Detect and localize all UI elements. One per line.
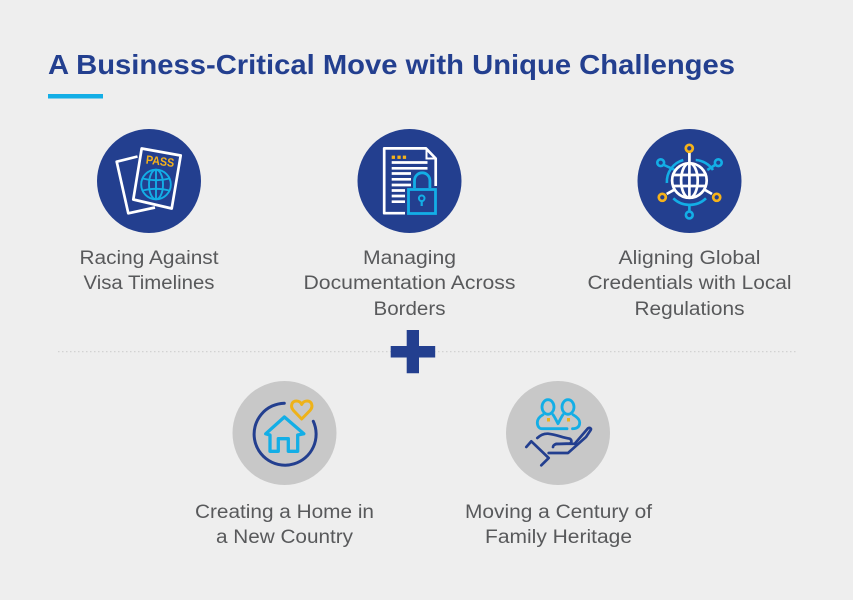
challenge: visa timelines <box>80 129 219 294</box>
challenge: family heritage <box>465 381 653 548</box>
label: global credentials: Regulations <box>634 299 744 320</box>
title: A Business-Critical Move with Unique Challenges <box>48 49 735 80</box>
plus sign <box>391 330 435 373</box>
label: visa timelines: Visa Timelines <box>84 273 214 294</box>
challenge: documentation <box>304 129 516 320</box>
icon: family in hand <box>506 381 610 485</box>
label: global credentials: Aligning Global <box>618 248 760 269</box>
title accent underline <box>48 94 103 98</box>
label: visa timelines: Racing Against <box>80 248 219 269</box>
icon: house and heart <box>232 381 336 485</box>
label: documentation: Documentation Across <box>304 273 516 294</box>
label: global credentials: Credentials with Local <box>588 273 792 294</box>
label: home in new country: a New Country <box>216 527 354 548</box>
challenge: home in new country <box>195 381 374 548</box>
label: home in new country: Creating a Home in <box>195 502 374 523</box>
label: family heritage: Moving a Century of <box>465 502 653 523</box>
label: family heritage: Family Heritage <box>485 527 632 548</box>
challenge: global credentials <box>588 129 792 320</box>
label: documentation: Managing <box>363 248 456 269</box>
icon: document with padlock <box>358 129 462 233</box>
icon: passport <box>97 129 201 233</box>
label: documentation: Borders <box>374 299 446 320</box>
icon: passport: PASS <box>145 153 175 170</box>
icon: networked globe <box>638 129 742 233</box>
